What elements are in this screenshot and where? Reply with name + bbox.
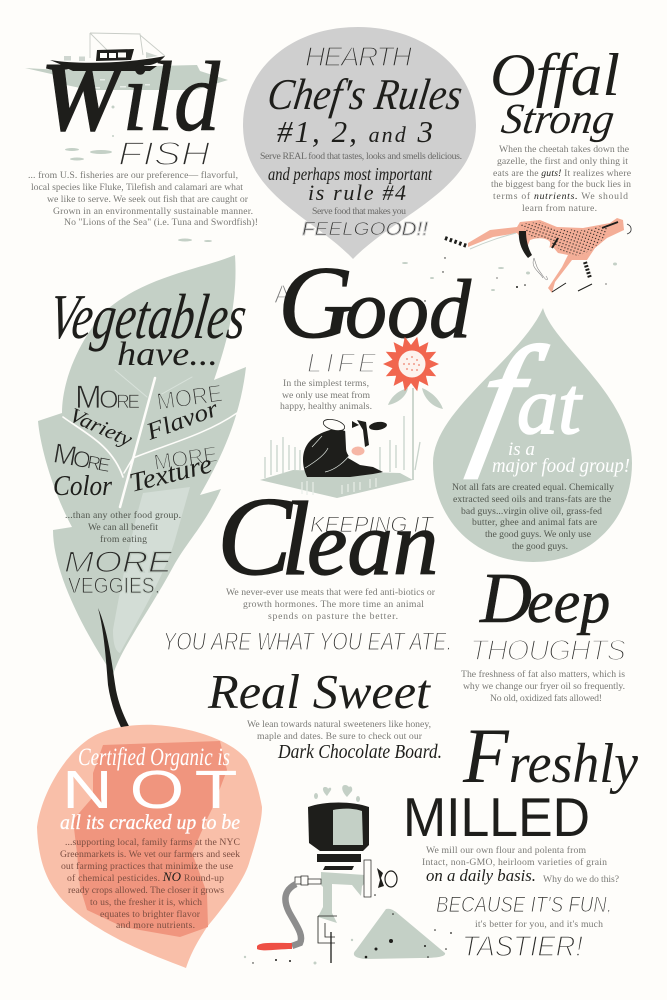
text: fats paragraph: the good guys. <box>512 541 568 552</box>
heading: A: A <box>274 279 292 309</box>
text: organic paragraph: equates to brighter flavor <box>100 909 201 920</box>
heading: Deep: D <box>479 558 532 638</box>
auger and flange <box>295 860 371 897</box>
text: fat freshness: why we change our fryer oil so frequently. <box>463 681 625 692</box>
text: tastier: TASTIER! <box>462 931 583 963</box>
grinder body <box>318 872 365 923</box>
heading: Keeping it: KEEPING IT <box>310 512 435 537</box>
panel: real sweet <box>207 664 442 763</box>
label: more flavor: Flavor <box>142 396 222 446</box>
panel: a good life <box>260 245 472 498</box>
text: fish paragraph: No "Lions of the Sea" (i.e. Tuna and Swordfish)! <box>64 217 258 228</box>
text: fats paragraph: extracted seed oils and trans-fats are the <box>453 494 611 505</box>
text: than any other food group <box>65 510 181 545</box>
heading: NOT: O <box>130 760 184 820</box>
heading: Good: G <box>278 245 353 360</box>
text: than any other food group: We can all benefit <box>88 522 158 533</box>
text: on a daily basis: on a daily basis. <box>426 866 536 885</box>
text: flour paragraph: We mill our own flour and polenta from <box>426 845 586 856</box>
panel: vegetables leaf <box>38 255 251 743</box>
darker wash <box>73 741 227 937</box>
heading: Strong: Strong <box>499 95 617 143</box>
text: on a daily basis <box>426 866 619 885</box>
text: fats paragraph: Not all fats are created equal. Chemically <box>452 482 614 493</box>
text: organic paragraph: and more nutrients. <box>116 920 195 931</box>
text: fats paragraph: bad guys...virgin olive oil, grass-fed <box>461 506 602 517</box>
flour pile <box>354 909 445 959</box>
text: than any other food group: from eating <box>100 534 147 545</box>
text: dark chocolate board: Dark Chocolate Board. <box>277 741 442 763</box>
heading: have: have... <box>117 336 218 373</box>
heading: Fish: FISH <box>118 135 210 172</box>
text: clean paragraph: spends on pasture the better. <box>268 611 398 622</box>
illustration: meat grinder and flour pile <box>244 785 452 964</box>
panel: freshly milled <box>403 712 638 963</box>
heading: all its cracked up: all its cracked up to be <box>60 810 240 834</box>
text: simplest terms: we only use meat from <box>282 390 370 401</box>
text: sweeteners <box>247 719 431 742</box>
text: flour paragraph <box>422 845 607 868</box>
panel: certified organic leaf <box>37 725 262 968</box>
heading: Clean: C <box>217 475 293 599</box>
heading: certified organic: Certified Organic is <box>78 744 230 771</box>
text: fish paragraph: ... from U.S. fisheries are our preference— flavorful, <box>28 170 238 181</box>
panel: keeping it clean <box>163 475 452 656</box>
text: clean paragraph: growth hormones. The more time an animal <box>243 599 424 610</box>
crank arm <box>285 884 301 946</box>
text: organic paragraph <box>60 837 240 931</box>
text: cheetah paragraph: terms of nutrients. We should <box>493 191 628 202</box>
text: organic paragraph: of chemical pesticides. NO Round-up <box>67 869 224 884</box>
text: flour paragraph: Intact, non-GMO, heirloom varieties of grain <box>422 857 607 868</box>
label: more veggies: VEGGIES. <box>68 573 160 598</box>
bubble shape <box>243 27 476 259</box>
text: sweeteners: maple and dates. Be sure to check out our <box>257 731 423 742</box>
heading: fat <box>463 316 583 479</box>
heading: Thoughts: THOUGHTS <box>470 635 627 667</box>
text: simplest terms: In the simplest terms, <box>283 378 369 389</box>
heading: Real Sweet: Real Sweet <box>207 664 431 719</box>
text: sweeteners: We lean towards natural sweeteners like honey, <box>247 719 431 730</box>
heading: Wild: Wild <box>40 41 221 152</box>
red handle <box>257 943 292 950</box>
steam hearts <box>314 785 360 802</box>
heading: NOT: N <box>62 760 113 820</box>
leaf veins <box>63 370 237 507</box>
text: feel good: FEELGOOD!! <box>302 219 428 239</box>
panel: deep thoughts <box>461 558 627 704</box>
crank wheel <box>377 868 397 888</box>
text: on a daily basis: Why do we do this? <box>543 874 619 885</box>
label: more variety <box>66 379 140 452</box>
panel: chef's rules speech bubble <box>243 27 476 259</box>
label: more flavor <box>142 380 224 446</box>
text: because it's fun: BECAUSE IT'S FUN, <box>436 892 612 917</box>
text: fats paragraph: the good guys. We only use <box>485 529 591 540</box>
text: organic paragraph: Greenmarkets is. We vet our farmers and seek <box>60 849 240 860</box>
text: fish paragraph <box>28 170 258 228</box>
text: cheetah paragraph: When the cheetah takes down the <box>499 144 629 155</box>
heading: Milled: MILLED <box>403 786 590 848</box>
text: is rule 4: is rule #4 <box>308 180 406 205</box>
text: serve real food: Serve REAL food that tastes, looks and smells delicious. <box>260 151 462 162</box>
text: fat freshness: No old, oxidized fats allowed! <box>490 693 602 704</box>
text: simplest terms: happy, healthy animals. <box>280 401 372 412</box>
heading: Clean: l <box>281 480 310 597</box>
label: more veggies: MORE <box>64 546 173 579</box>
heading: fat: at <box>517 360 583 451</box>
illustration: running cheetah <box>402 218 631 302</box>
text: you are what you eat ate: YOU ARE WHAT YOU EAT ATE. <box>163 628 452 656</box>
text: cheetah paragraph: learn from nature. <box>522 203 597 214</box>
text: organic paragraph: ready crops allowed. The closer it grows <box>68 885 224 896</box>
text: organic paragraph: out farming practices that minimize the use <box>61 861 233 872</box>
text: cheetah paragraph <box>491 144 631 214</box>
leaf highlight <box>113 487 190 653</box>
text: clean paragraph <box>226 587 436 622</box>
heading: Hearth: HEARTH <box>305 41 413 72</box>
drop shape <box>433 308 632 562</box>
label: more flavor: MORE <box>155 380 224 416</box>
text: serve food: Serve food that makes you <box>312 206 406 217</box>
label: more variety: MORE <box>75 379 140 415</box>
text: and perhaps most important: and perhaps most important <box>268 164 433 184</box>
label: more variety: Variety <box>66 403 137 452</box>
heading: Good: ood <box>345 263 472 356</box>
heading: Chef's Rules: Chef's Rules <box>265 70 465 119</box>
illustration: flower <box>383 337 443 480</box>
heading: Life: LIFE <box>307 348 377 378</box>
label: more texture: MORE <box>152 441 219 475</box>
label: more veggies <box>64 546 173 598</box>
text: fats paragraph <box>452 482 614 552</box>
leaf stem <box>98 608 137 743</box>
text: better for you: it's better for you, and it's much <box>475 919 603 930</box>
text: organic paragraph: to us, the fresher it is, which <box>90 897 202 908</box>
text: cheetah paragraph: eats are the guts! It realizes where <box>493 168 631 179</box>
text: cheetah paragraph: gazelle, the first and only thing it <box>497 156 628 167</box>
text: fats paragraph: butter, ghee and animal fats are <box>472 517 597 528</box>
heading: Freshly: Freshly <box>462 712 638 799</box>
heading: major food group: major food group! <box>492 455 630 477</box>
heading: Offal: Offal <box>490 42 620 108</box>
panel: fat teardrop <box>433 308 632 562</box>
text: cheetah paragraph: the biggest bang for the buck lies in <box>491 179 631 190</box>
heading: Vegetables: Vegetables <box>45 281 251 352</box>
heading: fat: f <box>463 316 556 479</box>
leaf shape <box>38 255 246 675</box>
text: fat freshness: The freshness of fat also matters, which is <box>461 669 625 680</box>
panel: wild fish <box>25 33 258 242</box>
illustration: fishing boat and water <box>25 33 228 242</box>
text: simplest terms <box>280 378 372 412</box>
heading: rules 1, 2 and 3: #1, 2, and 3 <box>277 114 433 149</box>
illustration: cow on grass <box>260 416 420 498</box>
text: fish paragraph: Grown in an environmentally sustainable manner. <box>53 206 253 217</box>
text: fish paragraph: local species like Fluke, Tilefish and calamari are what <box>31 182 243 193</box>
hopper <box>308 802 369 851</box>
text: clean paragraph: We never-ever use meats that were fed anti-biotics or <box>226 587 436 598</box>
label: more color: MORE <box>51 437 113 478</box>
label: more color: Color <box>53 471 112 502</box>
heading: Deep: eep <box>527 569 610 635</box>
heading: Clean: ean <box>307 493 438 594</box>
label: more texture: Texture <box>126 448 215 498</box>
heading: NOT: T <box>195 760 237 820</box>
text: fat freshness <box>461 669 625 704</box>
panel: offal strong <box>402 42 631 302</box>
label: more color <box>51 437 113 502</box>
heading: is a: is a <box>508 439 535 460</box>
text: than any other food group: ...than any other food group. <box>65 510 181 521</box>
text: fish paragraph: we like to serve. We seek out fish that are caught or <box>47 194 249 205</box>
text: organic paragraph: ...supporting local, family farms at the NYC <box>65 837 240 848</box>
peach leaf shape <box>37 725 262 968</box>
